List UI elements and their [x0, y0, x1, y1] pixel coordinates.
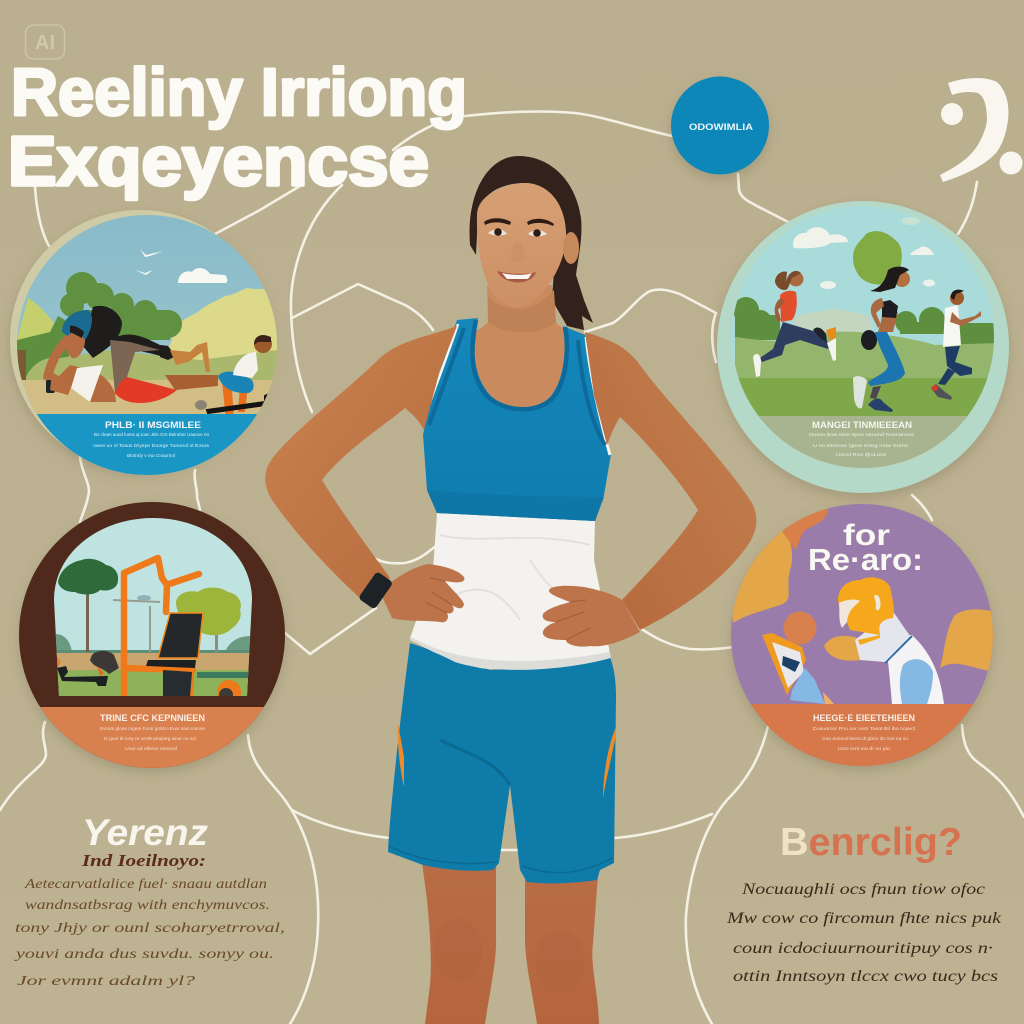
- body skin: [430, 285, 610, 450]
- text block: left column: Aetecarvatlalice fuel· snaau autdlan: [24, 877, 267, 892]
- band: floor exercise caption: owne uo ol Toaos Dryepn Doorge Tumorol ol Eoxos: [93, 443, 210, 448]
- band: floor exercise caption: [36, 414, 258, 475]
- AI badge: AI: [35, 32, 55, 54]
- band: running caption: Uorinl Roo @oLoos: [836, 452, 887, 457]
- text block: right column: Nocuaughli ocs fnun tiow ofoc: [741, 881, 985, 898]
- right arm: [585, 332, 756, 630]
- illustration: colour blobs: [725, 505, 995, 672]
- band: floor exercise caption: Bo clean aund lusns aj toan Jtiin Gm Belrober Uaanve rio: [94, 432, 209, 437]
- head with hair: [470, 156, 593, 332]
- left hand: [380, 564, 464, 622]
- illustration: trees and hills: [17, 272, 277, 420]
- text block: left column: youvi anda dus suvdu. sonyy ou.: [13, 947, 274, 962]
- title: Exqeyencse: [8, 122, 429, 200]
- blue tank top: [423, 318, 611, 521]
- band: outdoor gym caption: Evnom glone nrgere Eonir gslotro Eoor nral coonne: [100, 726, 206, 731]
- illustration: man with tablet: [762, 577, 944, 704]
- band: reading caption: HEEGE·E EIEETEHIEEN: [813, 713, 915, 724]
- band: reading caption: Dusuoroor Pno oor nom Toeot Bri ibo noavcl: [813, 726, 915, 731]
- heading: for recovery: for: [843, 519, 890, 552]
- text block: right column: [726, 821, 1002, 985]
- icon: abstract question mark: [940, 78, 1022, 182]
- panel: running circle: [700, 200, 1020, 493]
- illustration: lying woman: [43, 306, 218, 403]
- text block: right column: ottin Inntsoyn tlccx cwo tucy bcs: [733, 968, 998, 985]
- text block: left column: Yerenz: [82, 812, 209, 853]
- illustration: clouds and birds: [135, 249, 227, 283]
- illustration: park scenery: [50, 559, 255, 698]
- figure: smiling athlete: [265, 156, 756, 1024]
- band: outdoor gym caption: Is gooi tii rony re orot9 pnojneg wiue oo ozi: [104, 736, 196, 741]
- text block: left column: tony Jhjy or ounl scoharyetrroval,: [15, 921, 285, 936]
- title: [8, 55, 467, 200]
- right hand: [543, 586, 640, 647]
- band: reading caption: Iono Ionl ioo di oo pio: [838, 746, 891, 751]
- text block: right column: coun icdociuurnouritipuy cos n·: [733, 940, 993, 957]
- band: outdoor gym caption: [40, 707, 264, 768]
- band: running caption: U oo Deoroor Qpoe Entrg mow Sorno: [813, 443, 909, 448]
- AI badge: [26, 25, 64, 59]
- heading: for recovery: [808, 519, 923, 577]
- band: outdoor gym caption: Uooi od vlbevo eeoorol: [125, 746, 177, 751]
- illustration: orange exercise frame: [50, 558, 241, 704]
- panel: floor exercise circle: [8, 210, 277, 478]
- text block: left column: [13, 812, 285, 989]
- band: running caption: Dusou Bow Moe opon Vaound Roonanoos: [809, 432, 915, 437]
- blue badge circle: ODOWIMLIA: [689, 122, 754, 132]
- blue shorts: [388, 643, 616, 883]
- band: running caption: MANGEI TINMIEEEAN: [812, 420, 912, 431]
- band: reading caption: Ooo eoneod Bvrst dt gbno dtr non eq rio: [822, 736, 909, 741]
- band: outdoor gym caption: TRINE CFC KEPNNIEEN: [100, 713, 205, 724]
- title: Reeliny Irriong: [11, 55, 467, 130]
- blue badge circle: [671, 76, 769, 174]
- illustration: clouds and scenery: [734, 217, 994, 420]
- legs: [422, 862, 599, 1024]
- band: running caption: [758, 416, 968, 468]
- text block: left column: Ind Ioeilnoyo:: [81, 851, 206, 870]
- white shirt: [410, 513, 611, 670]
- panel: reading for recovery circle: [725, 504, 1005, 776]
- face features: [484, 218, 554, 282]
- heading: for recovery: Re·aro:: [808, 542, 923, 577]
- text block: right column: Benrclig?: [780, 821, 962, 864]
- text block: left column: wandnsatbsrag with enchymuvcos.: [25, 898, 270, 913]
- panel: outdoor gym circle: [10, 502, 300, 777]
- band: floor exercise caption: PHLB· II MSGMILEE: [105, 420, 201, 431]
- illustration: runner three: [931, 290, 981, 400]
- illustration: runner one: [753, 271, 836, 377]
- illustration: runner two: [853, 267, 910, 412]
- left arm: [265, 326, 457, 600]
- text block: left column: Jor evmnt adalm yl?: [17, 974, 195, 989]
- illustration: sitting woman: [195, 335, 272, 420]
- smartwatch: [358, 571, 393, 610]
- text block: right column: Mw cow co fircomun fhte nics puk: [726, 910, 1002, 927]
- band: reading caption: [750, 704, 974, 766]
- band: floor exercise caption: Blotraly v mo Cnaomol: [127, 453, 175, 458]
